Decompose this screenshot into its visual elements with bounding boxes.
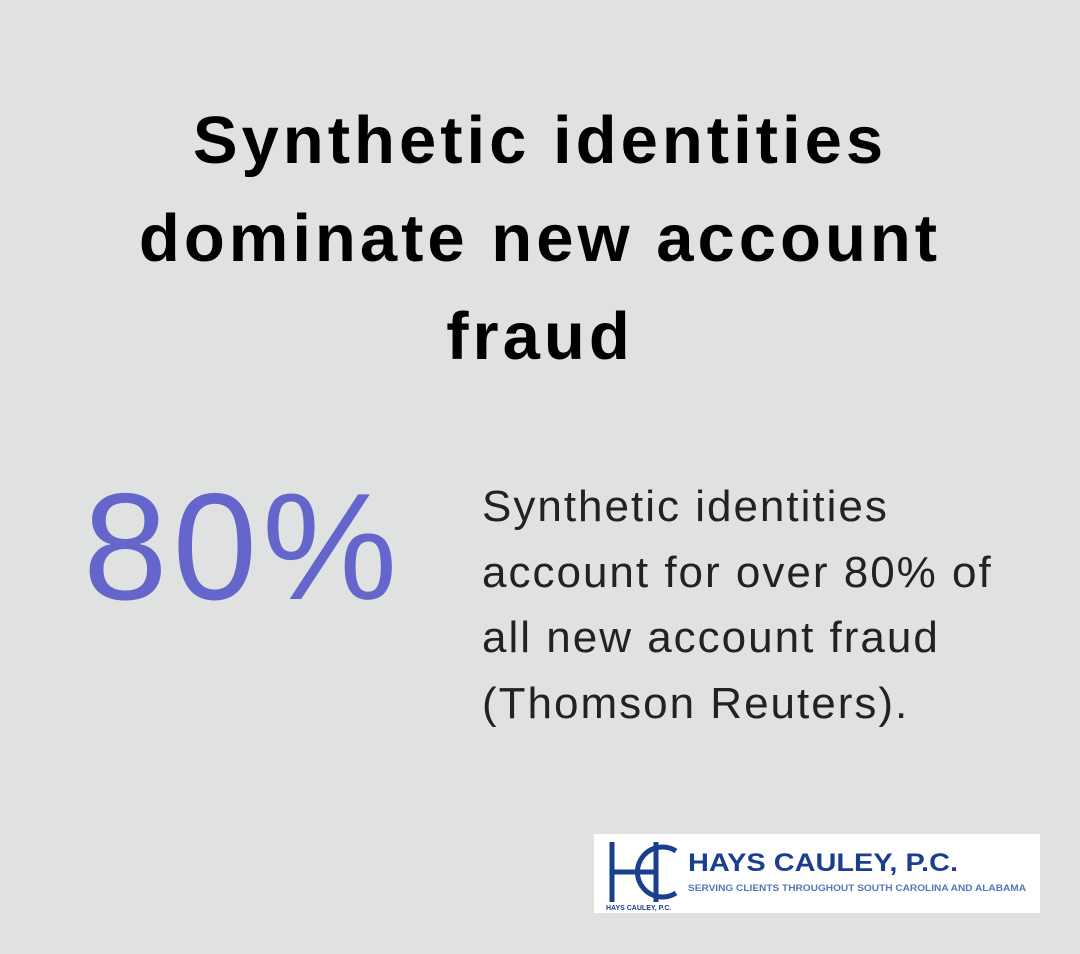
title: dominate new account — [139, 201, 941, 276]
description text: (Thomson Reuters). — [482, 678, 909, 728]
logo: HAYS CAULEY, P.C. — [606, 905, 671, 912]
title: fraud — [446, 299, 634, 374]
tagline: SERVING CLIENTS THROUGHOUT SOUTH CAROLINA AND ALABAMA — [688, 883, 1026, 894]
description text: Synthetic identities — [482, 482, 889, 531]
big stat: 80% — [83, 462, 402, 632]
title: Synthetic identities — [193, 103, 887, 178]
description text — [482, 482, 993, 728]
description text: account for over 80% of — [482, 548, 993, 596]
firm name: HAYS CAULEY, P.C. — [688, 849, 958, 877]
title — [139, 103, 941, 374]
icon: HC monogram — [612, 842, 676, 902]
description text: all new account fraud — [482, 613, 940, 662]
logo — [594, 834, 1040, 913]
